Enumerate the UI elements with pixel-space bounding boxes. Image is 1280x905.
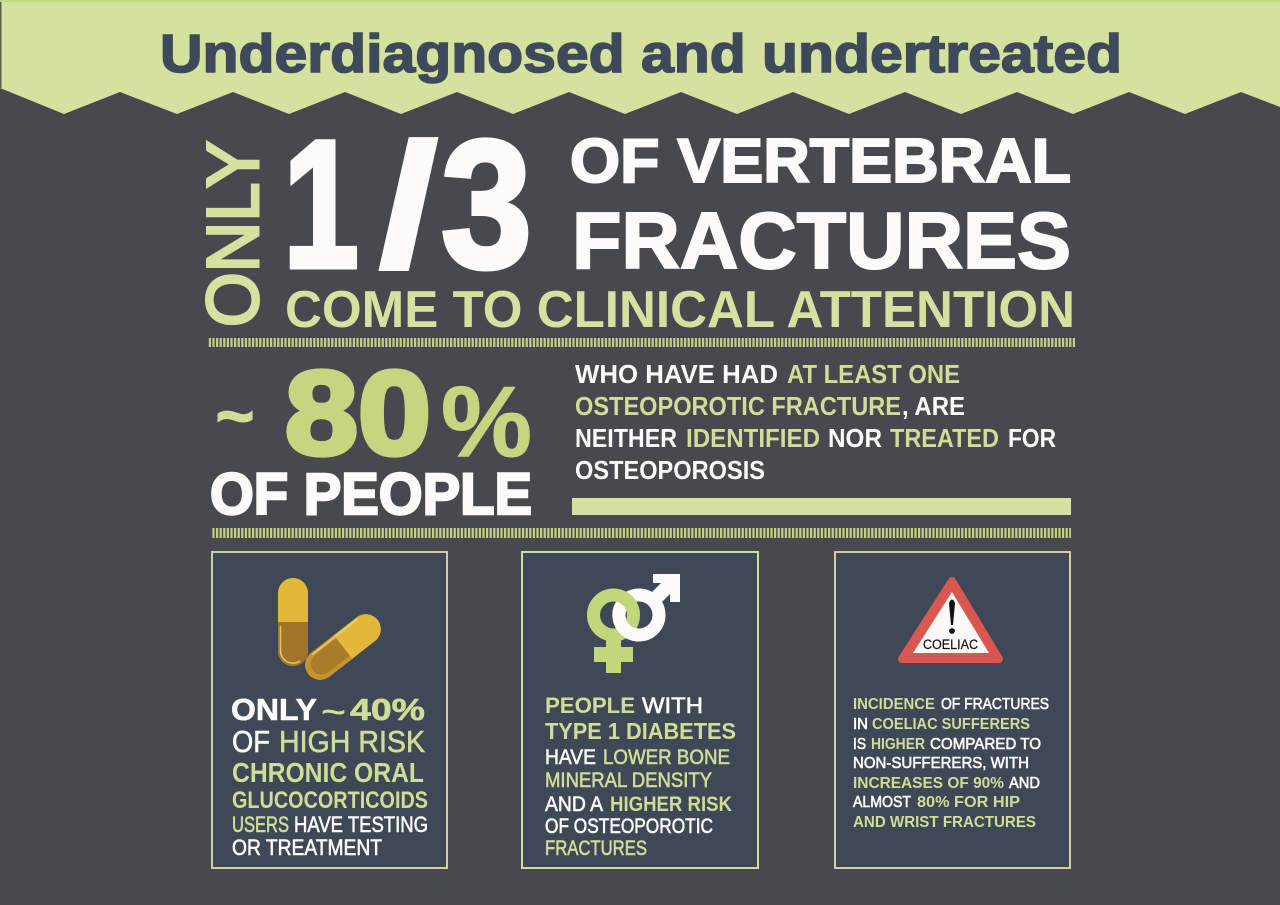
stat explanation text: FOR [1008,423,1056,453]
panel text: IS [853,736,866,753]
panel text: ~ [321,694,346,729]
panel text: INCREASES OF 90% [853,775,1004,792]
panel text: COELIAC SUFFERERS [872,716,1030,733]
panel text: HIGHER RISK [610,793,732,816]
panel text: GLUCOCORTICOIDS [232,787,428,814]
panel text: HIGH RISK [279,724,425,759]
stat explanation text: OSTEOPOROTIC FRACTURE [575,391,901,421]
stat explanation text: , ARE [902,391,965,421]
stat explanation text: AT LEAST ONE [787,359,960,389]
fractures: FRACTURES [572,196,1071,285]
panel text: NON-SUFFERERS, WITH [853,755,1029,772]
icon: capsules [278,578,387,686]
panel text: HAVE TESTING [294,812,428,837]
stat explanation text [575,359,1056,485]
panel: coeliac [835,552,1070,868]
title: Underdiagnosed and undertreated [160,24,1122,84]
panel text: LOWER BONE [603,746,730,769]
stat explanation text: TREATED [890,423,999,453]
stat explanation text: IDENTIFIED [686,423,820,453]
stat explanation text: OSTEOPOROSIS [575,455,765,485]
stat explanation text: WHO HAVE HAD [575,359,778,389]
panel text: TYPE 1 DIABETES [545,718,736,744]
icon: warning triangle: COELIAC [923,637,978,652]
panel text: ALMOST [853,794,911,811]
come to clinical attention: COME TO CLINICAL ATTENTION [285,281,1075,339]
stat explanation text: NEITHER [575,423,677,453]
panel text: INCIDENCE [853,696,935,713]
big fraction [283,102,532,306]
panel text [853,696,1049,831]
percent sign: % [441,366,532,478]
panel text: PEOPLE [545,693,635,718]
icon: warning triangle [902,581,999,659]
panel text: MINERAL DENSITY [545,769,712,792]
panel text: 80% FOR HIP [917,794,1020,811]
panel text: FRACTURES [545,837,647,860]
panel text: AND A [545,793,603,816]
panel text: IN [853,716,868,733]
icon: gender symbols [594,574,680,673]
80: 80 [285,347,431,480]
tilde: ~ [216,382,254,451]
banner [0,0,1280,114]
panel text: WITH [642,693,703,718]
panel text: HAVE [545,746,596,769]
of people: OF PEOPLE [210,462,532,527]
panel text: 40% [350,692,425,727]
panel text: CHRONIC ORAL [232,757,424,788]
of vertebral: OF VERTEBRAL [570,127,1071,196]
panel text: OR TREATMENT [232,835,382,860]
stat: 80 percent of people [210,347,532,527]
panel text: AND WRIST FRACTURES [853,814,1036,831]
panel text: USERS [232,812,289,837]
big fraction: 3 [441,102,532,306]
only, rotated: ONLY [193,141,274,327]
panel: type 1 diabetes [522,552,758,868]
panel text [231,692,428,860]
panel: glucocorticoids [212,552,447,868]
panel text [545,693,736,860]
big fraction: / [380,108,437,302]
panel text: OF FRACTURES [941,696,1049,713]
panel text: COMPARED TO [930,736,1041,753]
green bar [572,498,1071,515]
big fraction: 1 [283,102,359,306]
panel text: ONLY [231,692,317,727]
stat explanation text: NOR [828,423,882,453]
panel text: OF [232,724,270,759]
panel text: HIGHER [871,736,925,753]
panel text: OF OSTEOPOROTIC [545,815,713,838]
headline: only 1/3 of vertebral fractures [193,102,1075,339]
panel text: AND [1009,775,1040,792]
